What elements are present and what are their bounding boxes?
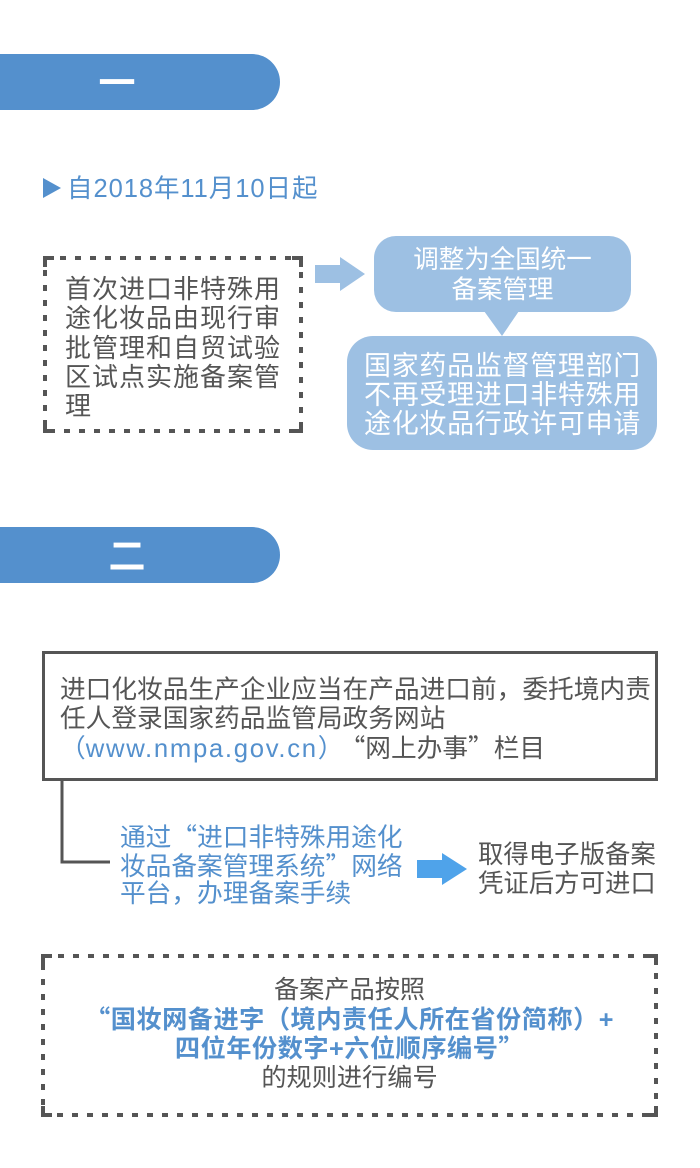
- blue text: filing system: 通过“进口非特殊用途化: [120, 817, 403, 854]
- bubble: no longer accepted: [347, 336, 657, 450]
- box text: 批管理和自贸试验: [65, 333, 281, 363]
- blue text: filing system: 妆品备案管理系统”网络: [120, 846, 403, 883]
- box text: [65, 274, 281, 421]
- box text: [85, 976, 614, 1092]
- bubble shape with tail: [374, 236, 631, 336]
- dashed border: [43, 256, 303, 433]
- section one numeral: 一: [98, 63, 136, 104]
- box text: 途化妆品由现行审: [65, 303, 281, 333]
- box text: 理: [65, 391, 92, 421]
- result text: 凭证后方可进口: [478, 870, 656, 898]
- bubble text: 调整为全国统一: [413, 246, 592, 274]
- arrow to result: [417, 853, 467, 885]
- dashed border: [41, 954, 658, 1117]
- box text: （www.nmpa.gov.cn） “网上办事”栏目: [60, 728, 545, 765]
- arrow to bubble: [315, 257, 365, 291]
- section two numeral: 二: [108, 536, 146, 577]
- solid box: import instructions: [42, 651, 658, 781]
- bubble text: [364, 351, 641, 439]
- date text: 自2018年11月10日起: [67, 175, 318, 203]
- connector line: [60, 781, 110, 864]
- box text: “国妆网备进字（境内责任人所在省份简称）+: [85, 1000, 614, 1036]
- blue text: filing system: 平台，办理备案手续: [120, 880, 351, 908]
- box text: 任人登录国家药品监管局政务网站: [60, 705, 445, 733]
- bubble text: 途化妆品行政许可申请: [364, 409, 641, 439]
- bubble text: [413, 246, 592, 304]
- section two banner: [0, 527, 280, 583]
- box text: 四位年份数字+六位顺序编号”: [175, 1029, 524, 1065]
- bubble text: 不再受理进口非特殊用: [364, 380, 641, 410]
- bubble text: 备案管理: [451, 276, 554, 304]
- section one banner: [0, 54, 280, 110]
- box text: 进口化妆品生产企业应当在产品进口前，委托境内责: [60, 676, 651, 704]
- box text: 备案产品按照: [274, 976, 425, 1004]
- dashed box: numbering rule: [41, 954, 658, 1117]
- dashed box: first import text: [43, 256, 303, 433]
- blue text: filing system: [120, 817, 403, 908]
- icon: triangle marker: [43, 178, 61, 198]
- bubble: unified filing: [374, 236, 631, 336]
- box text: 首次进口非特殊用: [65, 274, 281, 304]
- box text: 区试点实施备案管: [65, 362, 281, 392]
- result text: [478, 841, 656, 898]
- box text: [60, 676, 651, 765]
- bubble text: 国家药品监督管理部门: [364, 351, 641, 381]
- result text: 取得电子版备案: [478, 841, 656, 869]
- box text: 的规则进行编号: [261, 1064, 438, 1092]
- date heading: [43, 175, 318, 203]
